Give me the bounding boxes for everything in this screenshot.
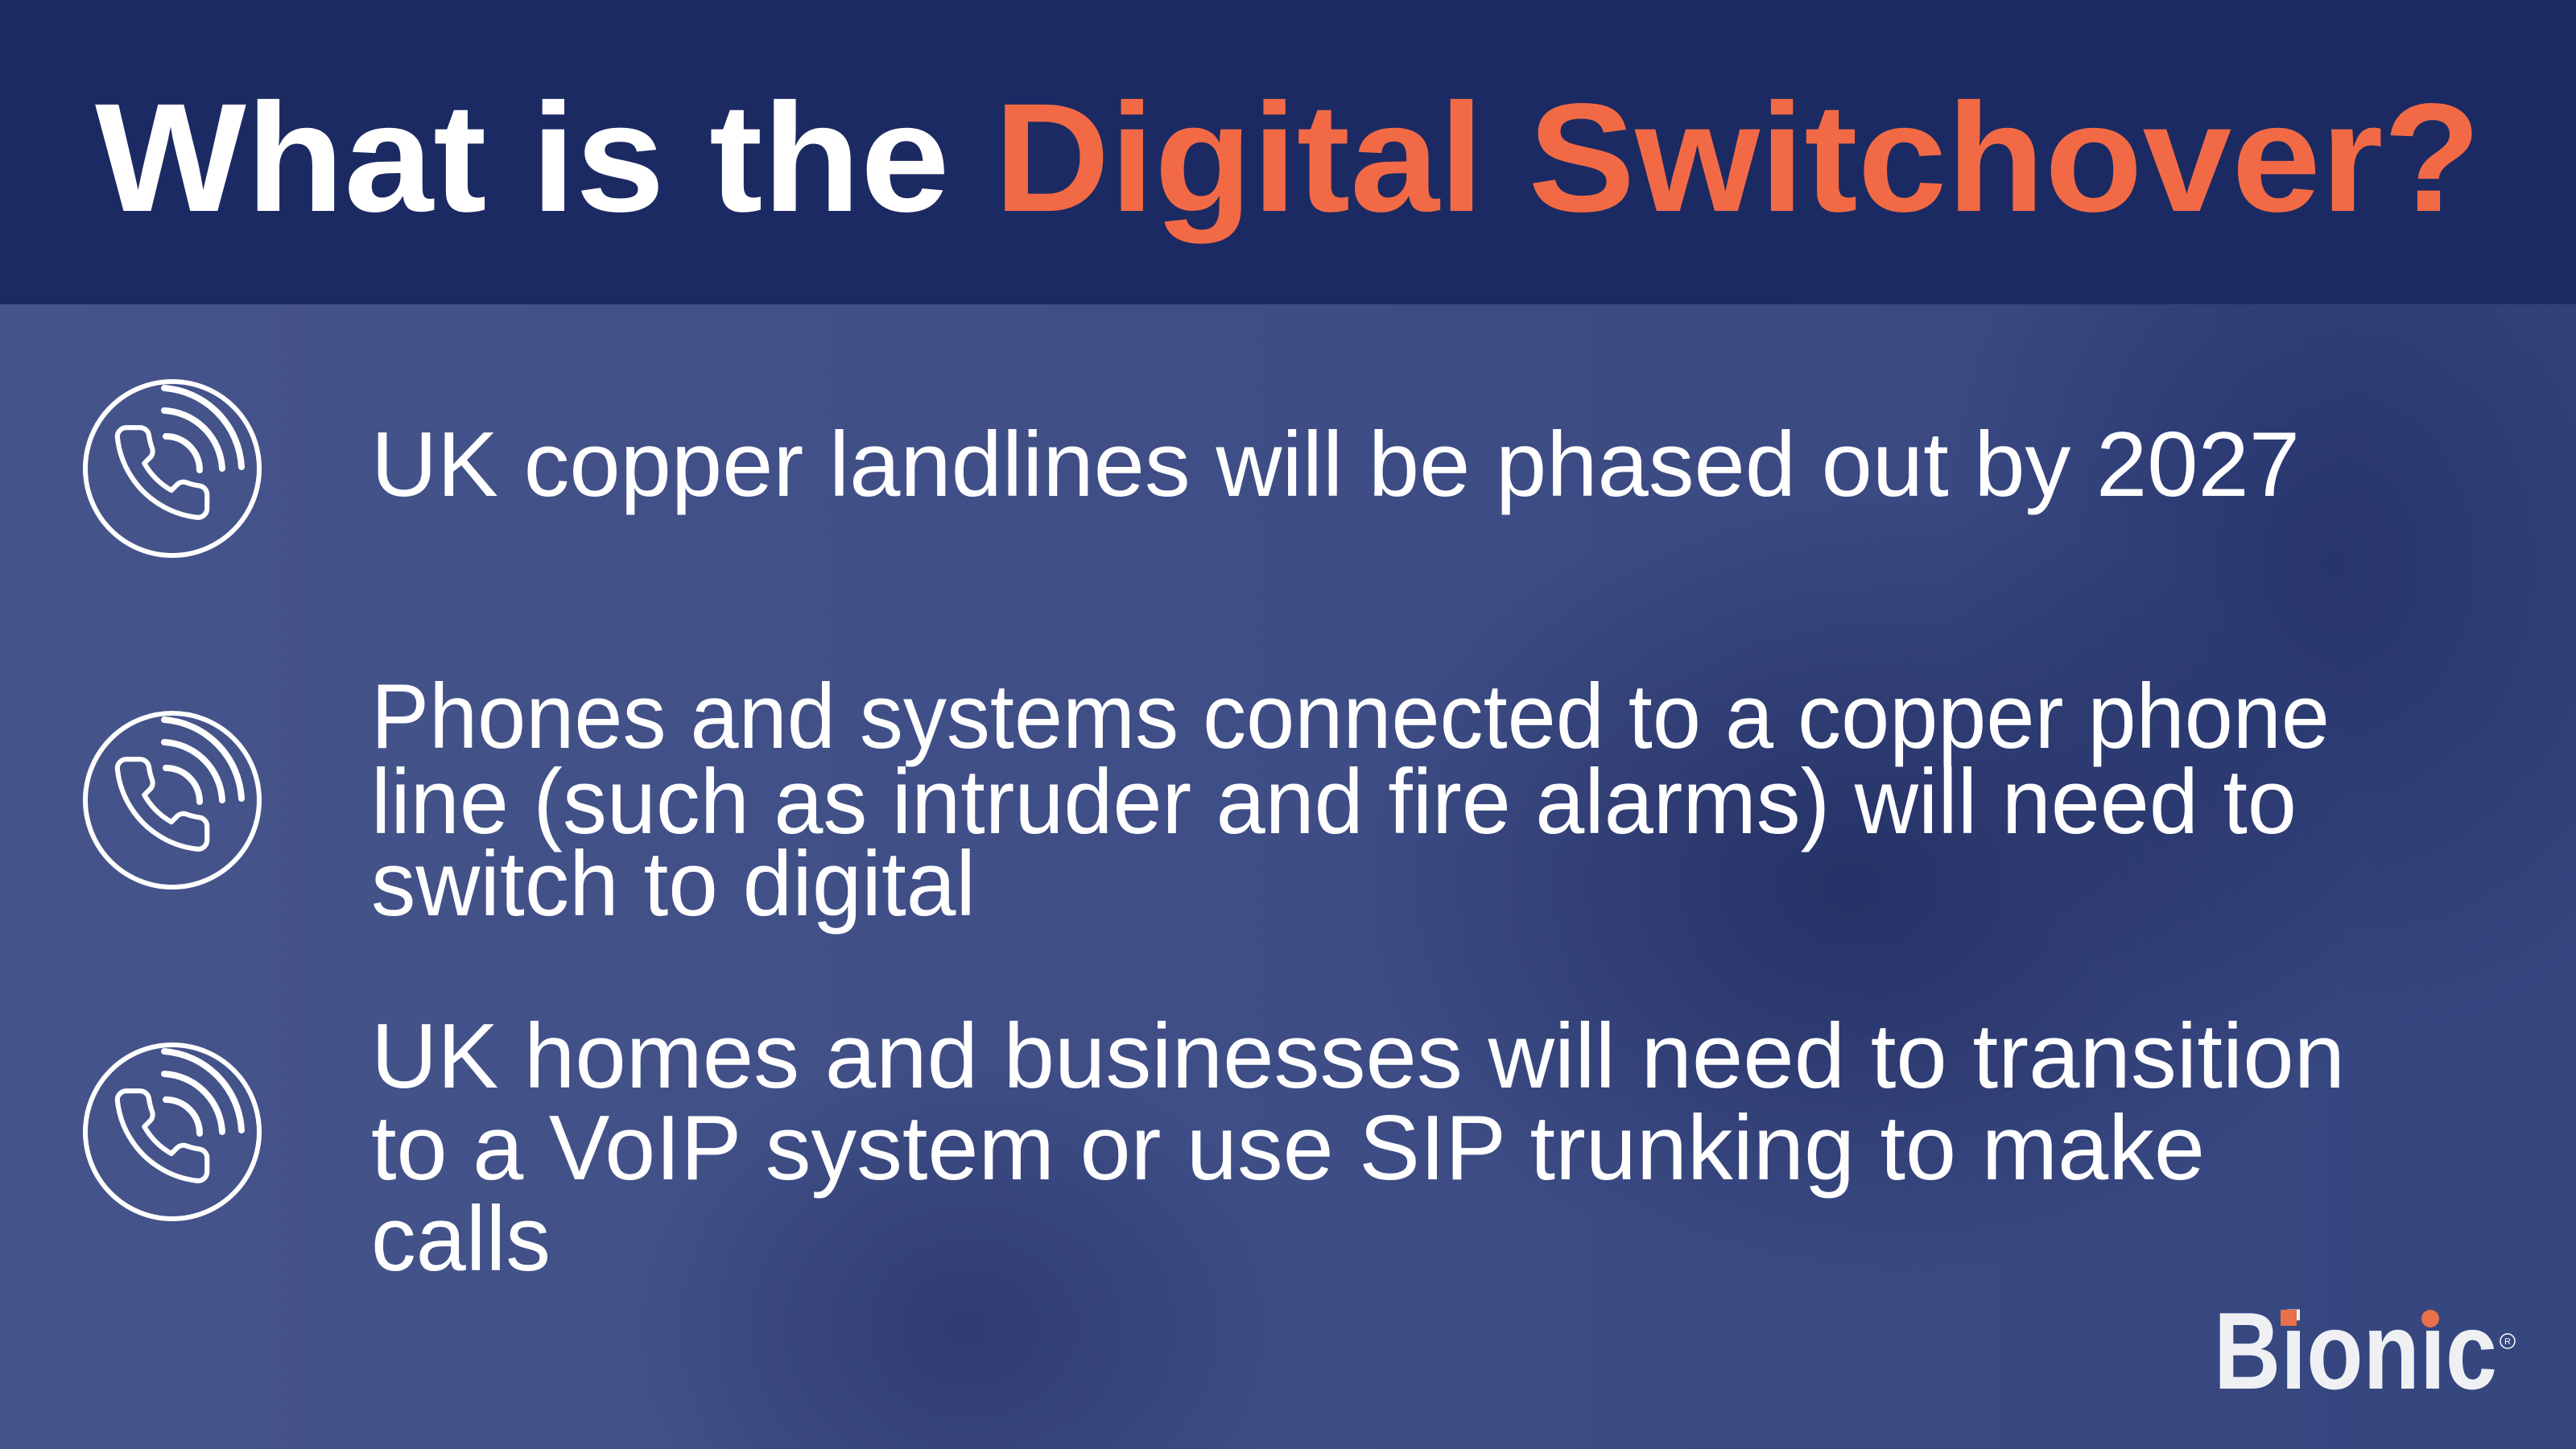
icon: phone 3 [85, 1045, 259, 1219]
logo: Bionic: R [2504, 1337, 2511, 1347]
text: point 2: Phones and systems connected to a copper phone [371, 666, 2330, 768]
text: point 3 [371, 1005, 2345, 1290]
text: point 3: UK homes and businesses will need to transition [371, 1005, 2345, 1108]
text: point 3: to a VoIP system or use SIP trunking to make [371, 1097, 2205, 1199]
text: point 2: line (such as intruder and fire alarms) will need to [371, 751, 2297, 853]
header band [0, 0, 2576, 304]
icon: phone 1 [85, 382, 259, 555]
logo: Bionic: Bionıc [2214, 1290, 2497, 1412]
text: point 1: UK copper landlines will be phased out by 2027 [371, 414, 2300, 516]
icon: phone 2 [85, 713, 259, 887]
title: What is the Digital Switchover? [95, 71, 2481, 244]
text: point 3: calls [371, 1188, 551, 1290]
text: point 2: switch to digital [371, 833, 976, 935]
text: point 2 [371, 666, 2330, 935]
